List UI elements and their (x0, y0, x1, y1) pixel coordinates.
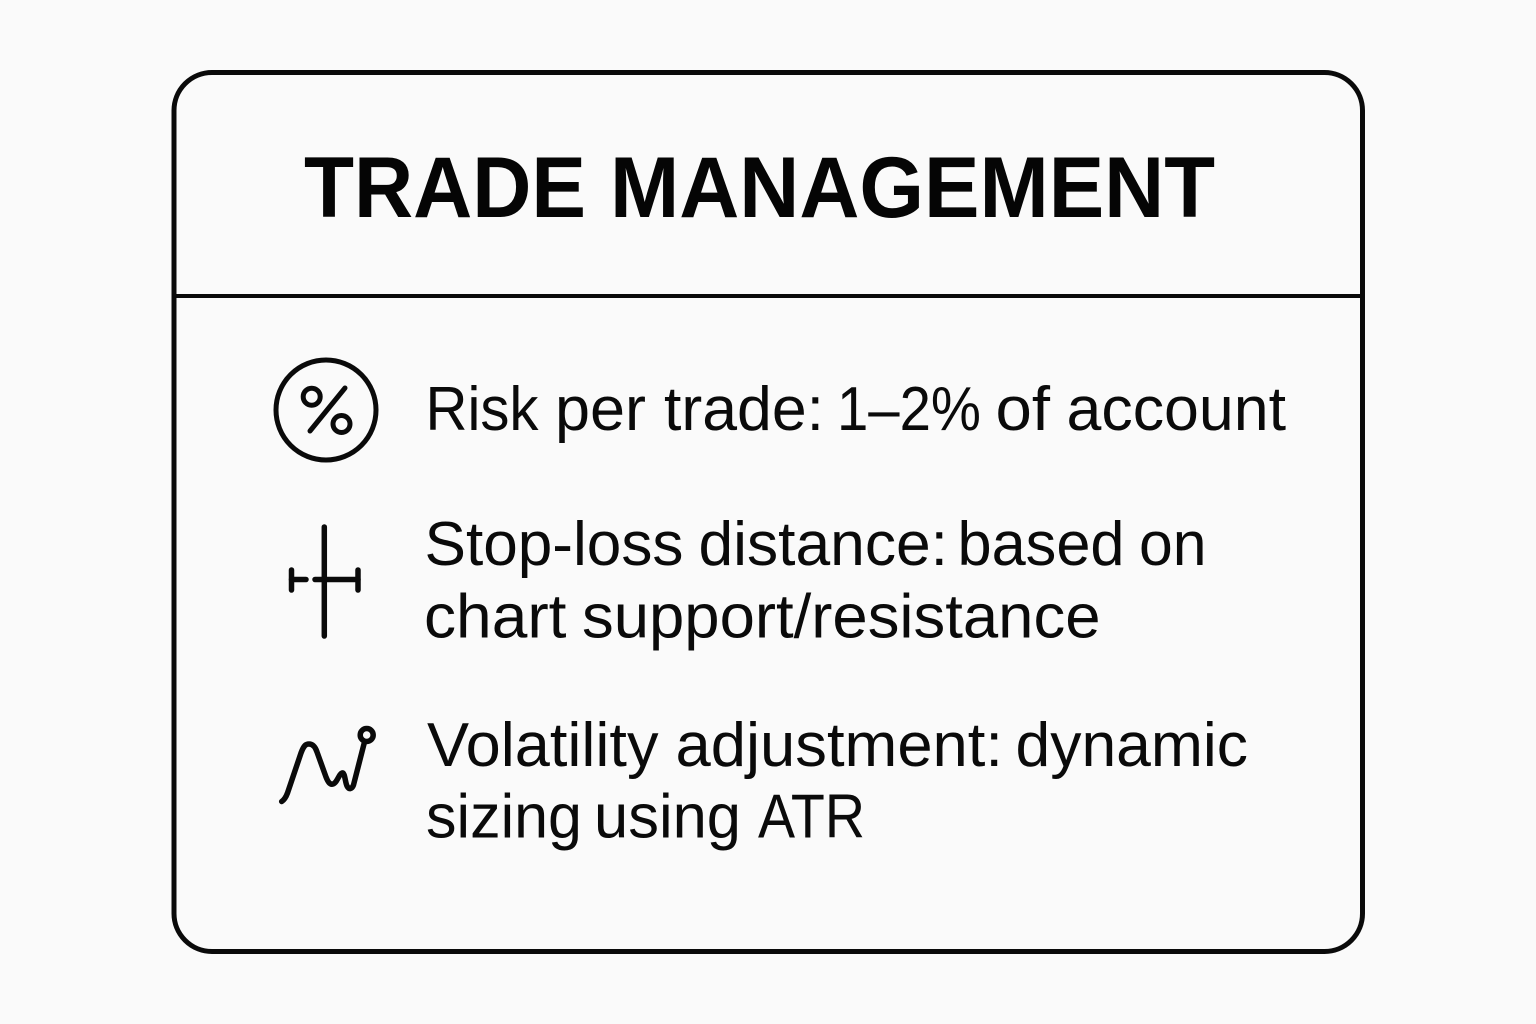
text: volatility adjustment: Volatility (427, 711, 658, 780)
text: volatility adjustment: adjustment: (676, 711, 1003, 780)
text: volatility adjustment (426, 711, 1248, 852)
text: volatility adjustment: using (594, 782, 741, 852)
text: volatility adjustment: sizing (426, 782, 582, 852)
text: risk per trade: account (1066, 375, 1286, 444)
text: risk per trade: per (555, 375, 646, 444)
text: stop-loss distance: on (1139, 510, 1206, 579)
text: stop-loss distance: chart (424, 582, 566, 652)
text: risk per trade: 1–2% (837, 375, 981, 444)
icon: price bar (292, 527, 358, 636)
text: stop-loss distance: based (958, 510, 1124, 579)
text: risk per trade: trade: (664, 375, 824, 444)
text: volatility adjustment: ATR (758, 782, 865, 852)
title: MANAGEMENT (610, 140, 1215, 236)
text: risk per trade: Risk (426, 375, 539, 444)
panel: trade management card (174, 72, 1362, 952)
text: stop-loss distance: Stop-loss (424, 510, 684, 579)
text: risk per trade: of (996, 375, 1051, 444)
icon: volatility line (282, 728, 373, 802)
text: volatility adjustment: dynamic (1016, 711, 1248, 780)
icon: percent circle (276, 360, 376, 460)
text: stop-loss distance: distance: (698, 510, 948, 579)
text: stop-loss distance: support/resistance (582, 582, 1100, 652)
text: risk per trade (426, 375, 1286, 444)
text: stop-loss distance (424, 510, 1206, 652)
title (304, 140, 1215, 236)
title: TRADE (304, 140, 586, 236)
